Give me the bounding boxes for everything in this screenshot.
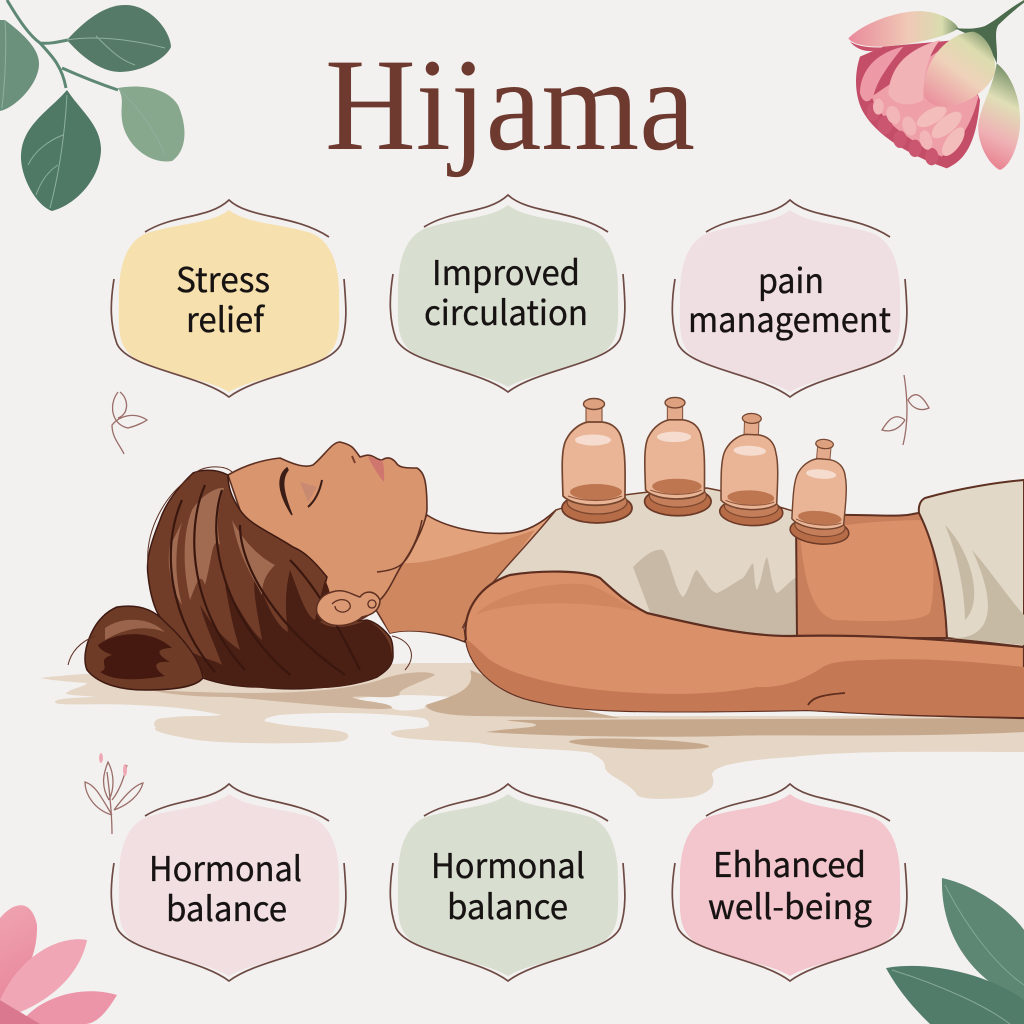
bun — [85, 606, 203, 690]
neck shadow — [372, 530, 535, 640]
woman lying down — [68, 442, 1024, 718]
garment top — [463, 488, 797, 638]
flower: top right — [848, 0, 1024, 170]
hair highlights — [169, 488, 275, 605]
cup 2 — [645, 397, 711, 516]
card: pain management — [672, 200, 907, 397]
cup 3 — [719, 412, 786, 527]
bun highlights — [105, 620, 165, 640]
bun shadow — [98, 634, 172, 679]
jaw line — [377, 520, 422, 572]
wrap shadows — [945, 525, 1024, 645]
card: pain management: management — [688, 293, 891, 342]
garment folds — [633, 550, 797, 637]
leaves: top left — [0, 0, 184, 211]
card: hormonal balance middle: Hormonal — [431, 839, 585, 888]
sprig: lower left — [85, 753, 143, 834]
stray hairs — [68, 467, 411, 670]
sprig: right — [882, 375, 929, 445]
hair strands — [171, 485, 360, 675]
eyelid — [300, 482, 317, 502]
floor shadow — [40, 663, 1024, 799]
eyebrow — [280, 468, 292, 515]
card: hormonal balance middle: balance — [447, 880, 568, 929]
lower wrap — [919, 480, 1024, 647]
elbow crease — [808, 693, 845, 705]
card: stress relief — [111, 200, 346, 397]
card: enhanced well-being: Ehhanced — [713, 838, 866, 887]
card: pain management: pain — [758, 254, 824, 303]
title: Hijama — [325, 31, 695, 178]
face — [228, 442, 427, 623]
eyelash — [308, 480, 322, 507]
card: improved circulation — [390, 195, 625, 392]
inner ear — [332, 600, 376, 612]
arm — [465, 572, 1024, 718]
shoulder shade — [475, 584, 640, 615]
card: enhanced well-being: well-being — [708, 880, 872, 929]
card: stress relief: relief — [186, 293, 266, 342]
card: hormonal balance middle — [390, 784, 625, 981]
lips — [368, 457, 384, 482]
ear — [317, 591, 380, 626]
waist skin — [796, 512, 947, 638]
card: hormonal balance left: Hormonal — [149, 842, 302, 891]
cup 1 — [562, 398, 632, 523]
hair lower shade — [188, 570, 392, 688]
sprig: left — [112, 392, 147, 454]
nostril — [352, 456, 355, 463]
card: stress relief: Stress — [176, 253, 270, 302]
neck — [370, 510, 556, 642]
card: improved circulation: circulation — [424, 286, 588, 335]
card: hormonal balance left — [111, 784, 346, 981]
hair — [148, 470, 393, 689]
cup 4 — [789, 437, 857, 546]
arm shadow — [466, 640, 1024, 717]
flower: bottom left — [0, 905, 117, 1024]
waist highlight — [800, 520, 933, 621]
card: enhanced well-being — [672, 784, 907, 981]
card: hormonal balance left: balance — [166, 882, 287, 931]
card: improved circulation: Improved — [432, 246, 580, 295]
leaves: bottom right — [886, 878, 1024, 1024]
